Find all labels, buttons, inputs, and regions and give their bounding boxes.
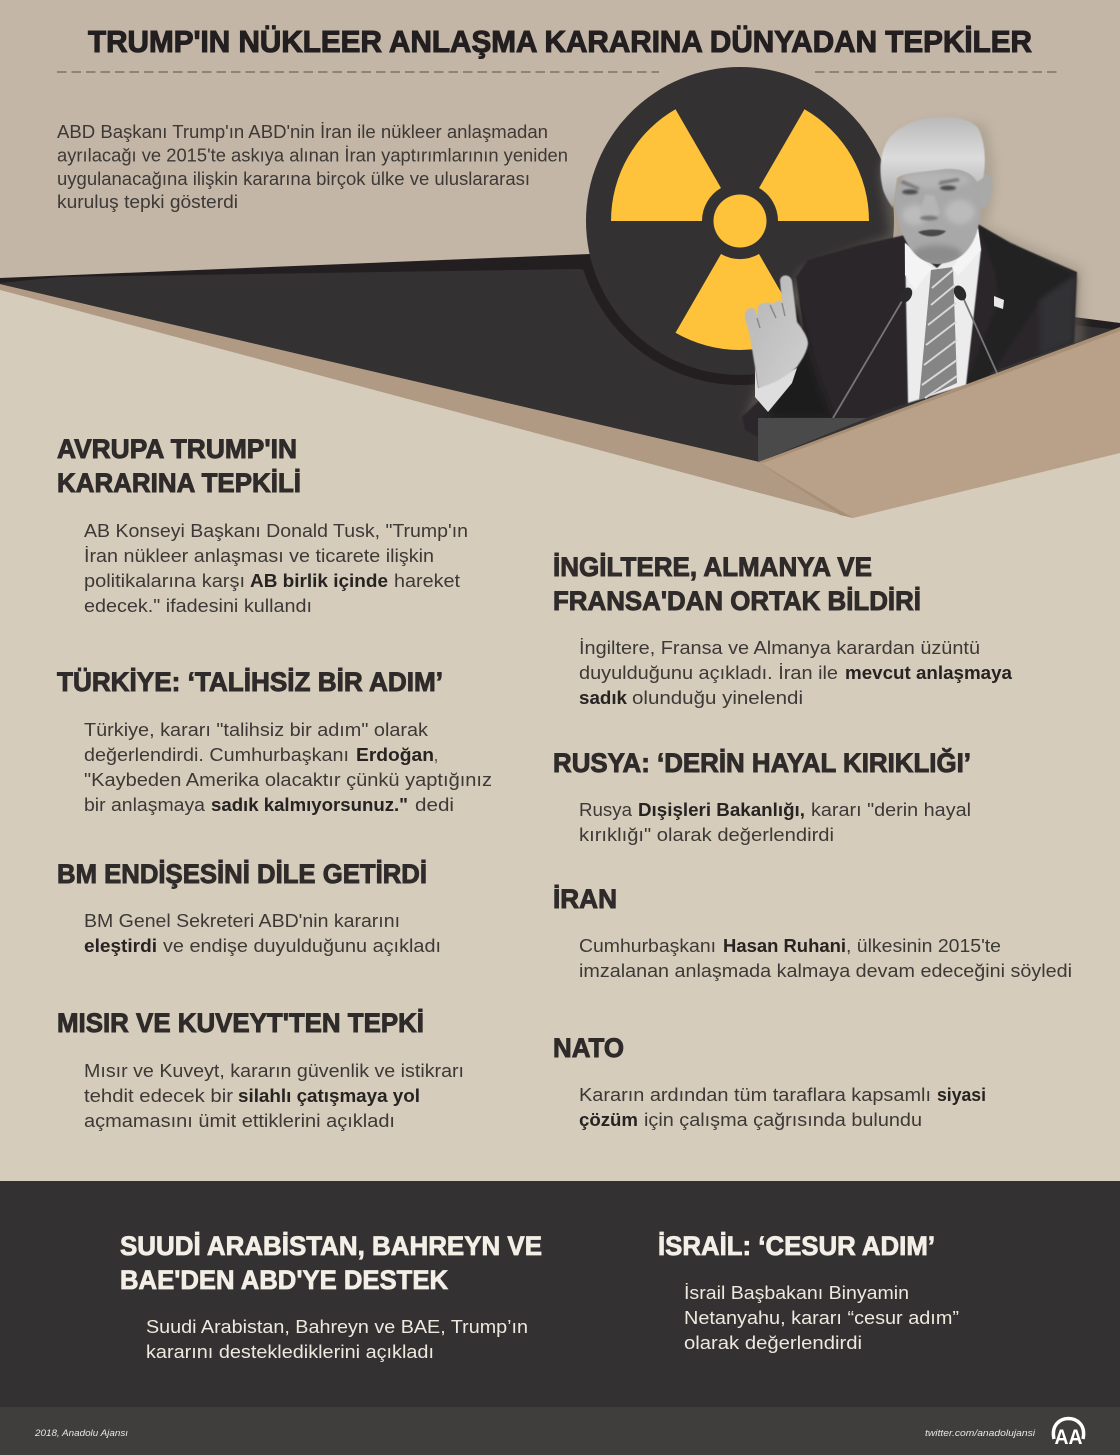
panel: İngiltere, Almanya, Fransa — [553, 552, 1013, 708]
finger gaps — [757, 303, 785, 328]
intro text: ayrılacağı ve 2015'te askıya alınan İran yaptırımlarının yeniden — [57, 144, 568, 166]
text: Türkiye: Türkiye, kararı "talihsiz bir adım" olarak — [84, 719, 429, 740]
text: Avrupa: edecek." ifadesini kullandı — [84, 595, 312, 616]
charcoal band face — [0, 269, 1120, 462]
text: Avrupa: politikalarına karşı — [84, 570, 245, 591]
nose — [920, 195, 940, 220]
suit sleeve right — [1040, 275, 1076, 355]
text: İran — [579, 935, 1072, 981]
heading: Mısır ve Kuveyt: MISIR VE KUVEYT'TEN TEPKİ — [57, 1008, 424, 1038]
panel: Türkiye — [57, 667, 492, 815]
text: İran: imzalanan anlaşmada kalmaya devam edeceğini söyledi — [579, 960, 1072, 981]
heading: Rusya: RUSYA: ‘DERİN HAYAL KIRIKLIĞI’ — [553, 748, 971, 778]
credit: 2018, Anadolu Ajansı — [34, 1428, 129, 1438]
text: Türkiye: değerlendirdi. Cumhurbaşkanı — [84, 744, 349, 765]
raised hand — [745, 275, 808, 388]
panel: NATO — [553, 1033, 986, 1130]
eyes — [900, 178, 960, 194]
dark band background — [0, 1181, 1120, 1407]
soft cut-out shadow — [745, 121, 1084, 420]
panel: BM — [57, 859, 441, 956]
shirt cuff — [755, 368, 797, 412]
tan lower strip — [0, 284, 853, 518]
mic heads — [897, 283, 969, 305]
footer bar — [0, 1407, 1120, 1455]
text: Suudi Arabistan: Suudi Arabistan, Bahreyn ve BAE, Trump’ın — [146, 1316, 528, 1337]
darker inner fold — [758, 462, 853, 518]
intro text — [57, 121, 568, 212]
intro text: kuruluş tepki gösterdi — [57, 191, 238, 212]
text: İngiltere, Almanya, Fransa: olunduğu yinelendi — [632, 687, 803, 708]
heading: İngiltere, Almanya, Fransa: İNGİLTERE, ALMANYA VE — [553, 552, 872, 582]
footer background — [0, 1407, 1120, 1455]
heading: Suudi Arabistan: SUUDİ ARABİSTAN, BAHREYN VE — [120, 1231, 542, 1261]
heading: Suudi Arabistan: BAE'DEN ABD'YE DESTEK — [120, 1265, 448, 1295]
collar — [905, 243, 932, 290]
text: Rusya: kırıklığı" olarak değerlendirdi — [579, 824, 834, 845]
text: İngiltere, Almanya, Fransa — [579, 637, 1013, 708]
block: İsrail — [658, 1231, 959, 1353]
text: İran: Hasan Ruhani — [723, 935, 846, 956]
text: Mısır ve Kuveyt: tehdit edecek bir — [84, 1085, 233, 1106]
text: Mısır ve Kuveyt: açmamasını ümit ettiklerini açıkladı — [84, 1110, 395, 1131]
heading: Avrupa: KARARINA TEPKİLİ — [57, 468, 301, 498]
text: Avrupa: AB birlik içinde — [250, 570, 388, 591]
text: Avrupa: hareket — [394, 570, 460, 591]
panel: Avrupa — [57, 434, 468, 616]
heading: İngiltere, Almanya, Fransa: FRANSA'DAN ORTAK BİLDİRİ — [553, 586, 921, 616]
main tan panel — [760, 330, 1120, 518]
panel: Mısır ve Kuveyt — [57, 1008, 464, 1131]
text: Türkiye: Erdoğan — [356, 744, 434, 765]
title: TRUMP'IN NÜKLEER ANLAŞMA KARARINA DÜNYADAN TEPKİLER — [88, 24, 1032, 59]
text: Rusya: Rusya — [579, 799, 633, 820]
mouth — [918, 230, 946, 236]
face shading — [900, 172, 975, 265]
social handle: twitter.com/anadolujansi — [925, 1428, 1036, 1438]
text: Rusya: Dışişleri Bakanlığı, — [638, 799, 805, 820]
collar right — [952, 228, 981, 276]
text: Türkiye — [84, 719, 492, 815]
text: Rusya: kararı "derin hayal — [811, 799, 971, 820]
text: BM: ve endişe duyulduğunu açıkladı — [163, 935, 441, 956]
hub — [714, 194, 766, 248]
text: Mısır ve Kuveyt: Mısır ve Kuveyt, kararın güvenlik ve istikrarı — [84, 1060, 464, 1081]
suit lapel right — [962, 226, 1075, 393]
suit — [742, 224, 1077, 437]
text: NATO: siyasi — [937, 1084, 986, 1105]
heading: Türkiye: TÜRKİYE: ‘TALİHSİZ BİR ADIM’ — [57, 667, 443, 697]
text: İngiltere, Almanya, Fransa: mevcut anlaşmaya — [845, 662, 1013, 683]
text: Avrupa: AB Konseyi Başkanı Donald Tusk, "Trump'ın — [84, 520, 468, 541]
black upper edge of band — [0, 254, 1120, 462]
title dashed rule right — [815, 71, 1059, 73]
heading: Suudi Arabistan — [120, 1231, 542, 1295]
tie — [919, 267, 957, 400]
text: İsrail: İsrail Başbakanı Binyamin — [684, 1282, 909, 1303]
text: BM: BM Genel Sekreteri ABD'nin kararını — [84, 910, 400, 931]
text: Türkiye: , — [434, 744, 438, 765]
darker fold edge — [758, 327, 1120, 463]
text: İsrail: Netanyahu, kararı “cesur adım” — [684, 1307, 959, 1328]
heading: İran: İRAN — [553, 884, 617, 914]
text: Türkiye: dedi — [415, 794, 454, 815]
folded band illustration — [0, 254, 1120, 1181]
right blade — [759, 109, 869, 221]
icon: agency logo: AA — [1054, 1426, 1082, 1449]
flag pin — [994, 296, 1004, 309]
text: NATO: için çalışma çağrısında bulundu — [644, 1109, 922, 1130]
text: Mısır ve Kuveyt — [84, 1060, 464, 1131]
heading: NATO: NATO — [553, 1033, 624, 1063]
text: Rusya — [579, 799, 971, 845]
text: İngiltere, Almanya, Fransa: duyulduğunu açıkladı. İran ile — [579, 662, 838, 683]
intro text: ABD Başkanı Trump'ın ABD'nin İran ile nükleer anlaşmadan — [57, 121, 548, 142]
text: İngiltere, Almanya, Fransa: sadık — [579, 687, 628, 708]
panel: supporters dark band — [0, 1181, 1120, 1407]
microphones — [833, 293, 997, 418]
ring shadow — [584, 270, 755, 385]
background: upper taupe panel — [0, 0, 1120, 518]
hair — [880, 117, 985, 208]
text: Avrupa — [84, 520, 468, 616]
text: İsrail — [684, 1282, 959, 1353]
shirt — [905, 228, 981, 403]
beige wedge under band — [0, 290, 1120, 1181]
text: NATO: Kararın ardından tüm taraflara kapsamlı — [579, 1084, 931, 1105]
text: İsrail: olarak değerlendirdi — [684, 1332, 862, 1353]
tan fold foreground — [758, 327, 1120, 518]
heading: Avrupa — [57, 434, 301, 498]
panel: Rusya — [553, 748, 971, 845]
text: NATO: çözüm — [579, 1109, 638, 1130]
panel: İran — [553, 884, 1072, 981]
black disc — [586, 67, 894, 375]
bottom blade — [676, 254, 804, 350]
icon: radiation symbol — [576, 57, 904, 385]
text: BM: eleştirdi — [84, 935, 157, 956]
text: Avrupa: İran nükleer anlaşması ve ticarete ilişkin — [84, 545, 434, 566]
face — [895, 162, 981, 264]
heading: BM: BM ENDİŞESİNİ DİLE GETİRDİ — [57, 859, 427, 889]
intro text: uygulanacağına ilişkin kararına birçok ülke ve uluslararası — [57, 168, 530, 189]
text: Türkiye: bir anlaşmaya — [84, 794, 206, 815]
heading: Avrupa: AVRUPA TRUMP'IN — [57, 434, 297, 464]
text: İran: Cumhurbaşkanı — [579, 935, 716, 956]
suit shadow fold — [770, 300, 833, 418]
text: BM — [84, 910, 441, 956]
left blade — [611, 109, 721, 221]
text: İngiltere, Almanya, Fransa: İngiltere, Fransa ve Almanya karardan üzüntü — [579, 637, 980, 658]
title dashed rule left — [57, 71, 659, 73]
text: Suudi Arabistan — [146, 1316, 528, 1362]
photo: speaker at podium — [742, 117, 1084, 462]
block: Suudi Arabistan, Bahreyn, BAE — [120, 1231, 542, 1362]
text: Mısır ve Kuveyt: silahlı çatışmaya yol — [238, 1085, 420, 1106]
text: Türkiye: "Kaybeden Amerika olacaktır çünkü yaptığınız — [84, 769, 492, 790]
podium — [758, 418, 867, 462]
text: Suudi Arabistan: kararını desteklediklerini açıkladı — [146, 1341, 434, 1362]
ear — [978, 172, 992, 208]
text: Türkiye: sadık kalmıyorsunuz." — [211, 794, 408, 815]
text: NATO — [579, 1084, 986, 1130]
heading: İsrail: İSRAİL: ‘CESUR ADIM’ — [658, 1231, 935, 1261]
heading: İngiltere, Almanya, Fransa — [553, 552, 921, 616]
text: İran: , ülkesinin 2015'te — [846, 935, 1001, 956]
